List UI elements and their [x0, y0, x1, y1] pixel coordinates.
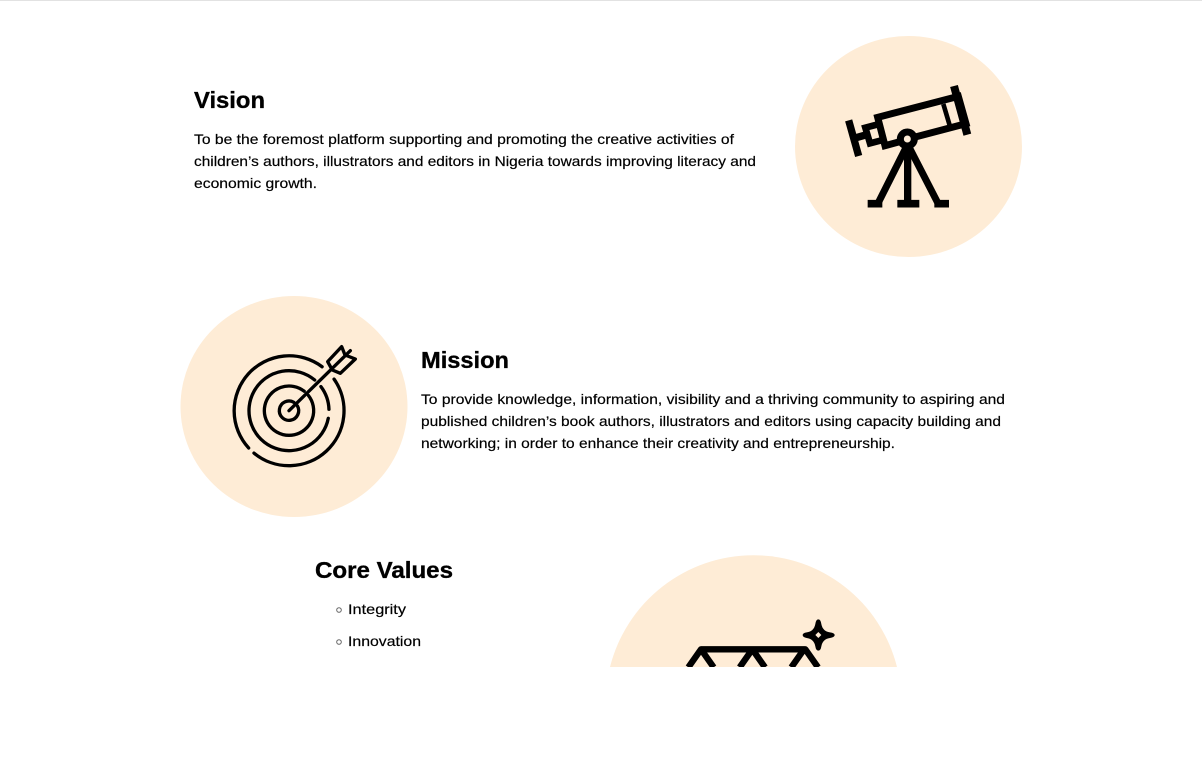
text block: mission statement: published children’s book authors, illustrators and editors using capacity building and [421, 413, 1001, 429]
list: values: Integrity [348, 601, 406, 617]
list: values [337, 601, 421, 649]
heading: Core Values: Core Values [315, 557, 453, 583]
panel: mission [180, 296, 1005, 517]
text block: vision statement [194, 131, 756, 191]
icon: target with arrow in circle [180, 296, 408, 517]
text block: vision statement: economic growth. [194, 175, 317, 191]
text block: mission statement [421, 391, 1005, 451]
icon: structure with sparkle in circle, cropped [610, 555, 897, 667]
text block: vision statement: children’s authors, illustrators and editors in Nigeria towards improving literacy and [194, 153, 756, 169]
heading: Vision: Vision [194, 87, 265, 113]
text block: mission statement: To provide knowledge, information, visibility and a thriving community to aspiring and [421, 391, 1005, 407]
list: values: Innovation [348, 633, 421, 649]
icon: telescope in circle [795, 36, 1022, 257]
text block: mission statement: networking; in order to enhance their creativity and entrepreneurship. [421, 435, 895, 451]
text block: vision statement: To be the foremost platform supporting and promoting the creative activities of [194, 131, 734, 147]
panel: vision [194, 36, 1022, 257]
heading: Mission: Mission [421, 347, 509, 373]
panel: core values [315, 555, 897, 667]
